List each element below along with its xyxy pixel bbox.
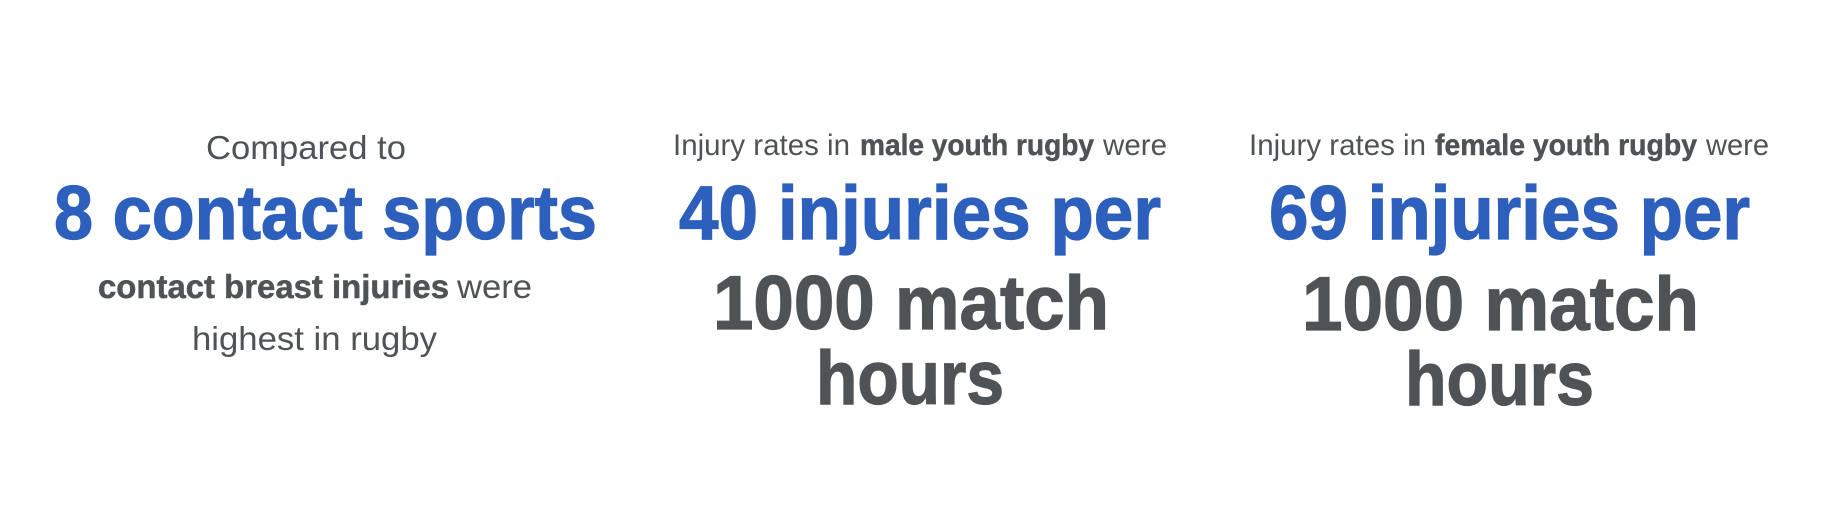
text: compared to: Compared to xyxy=(206,129,406,166)
text: contact breast injuries were: contact breast injuries xyxy=(98,268,449,305)
heading: 40 injuries per: 40 injuries per xyxy=(679,171,1161,256)
heading: 8 contact sports: 8 contact sports xyxy=(54,171,597,256)
panel: male youth rugby xyxy=(673,129,1167,421)
text: injury rates in female youth rugby were: female youth rugby xyxy=(1435,129,1697,162)
text: injury rates in female youth rugby were xyxy=(1249,129,1769,162)
text: contact breast injuries were: were xyxy=(456,268,532,305)
text: injury rates in male youth rugby were xyxy=(673,129,1167,162)
stat: 1000 match: 1000 match xyxy=(713,261,1109,346)
stat: hours: hours xyxy=(816,336,1004,421)
text: injury rates in female youth rugby were: were xyxy=(1705,129,1769,162)
stat: hours: hours xyxy=(1405,337,1594,422)
panel: female youth rugby xyxy=(1249,129,1769,422)
text: injury rates in male youth rugby were: male youth rugby xyxy=(860,129,1094,162)
heading: 69 injuries per: 69 injuries per xyxy=(1269,171,1750,256)
text: highest in rugby: highest in rugby xyxy=(192,320,438,357)
stat: 1000 match: 1000 match xyxy=(1302,262,1699,347)
text: injury rates in female youth rugby were: Injury rates in xyxy=(1249,129,1426,162)
text: injury rates in male youth rugby were: were xyxy=(1102,129,1167,162)
text: injury rates in male youth rugby were: Injury rates in xyxy=(673,129,850,162)
panel: contact sports comparison xyxy=(54,129,597,357)
